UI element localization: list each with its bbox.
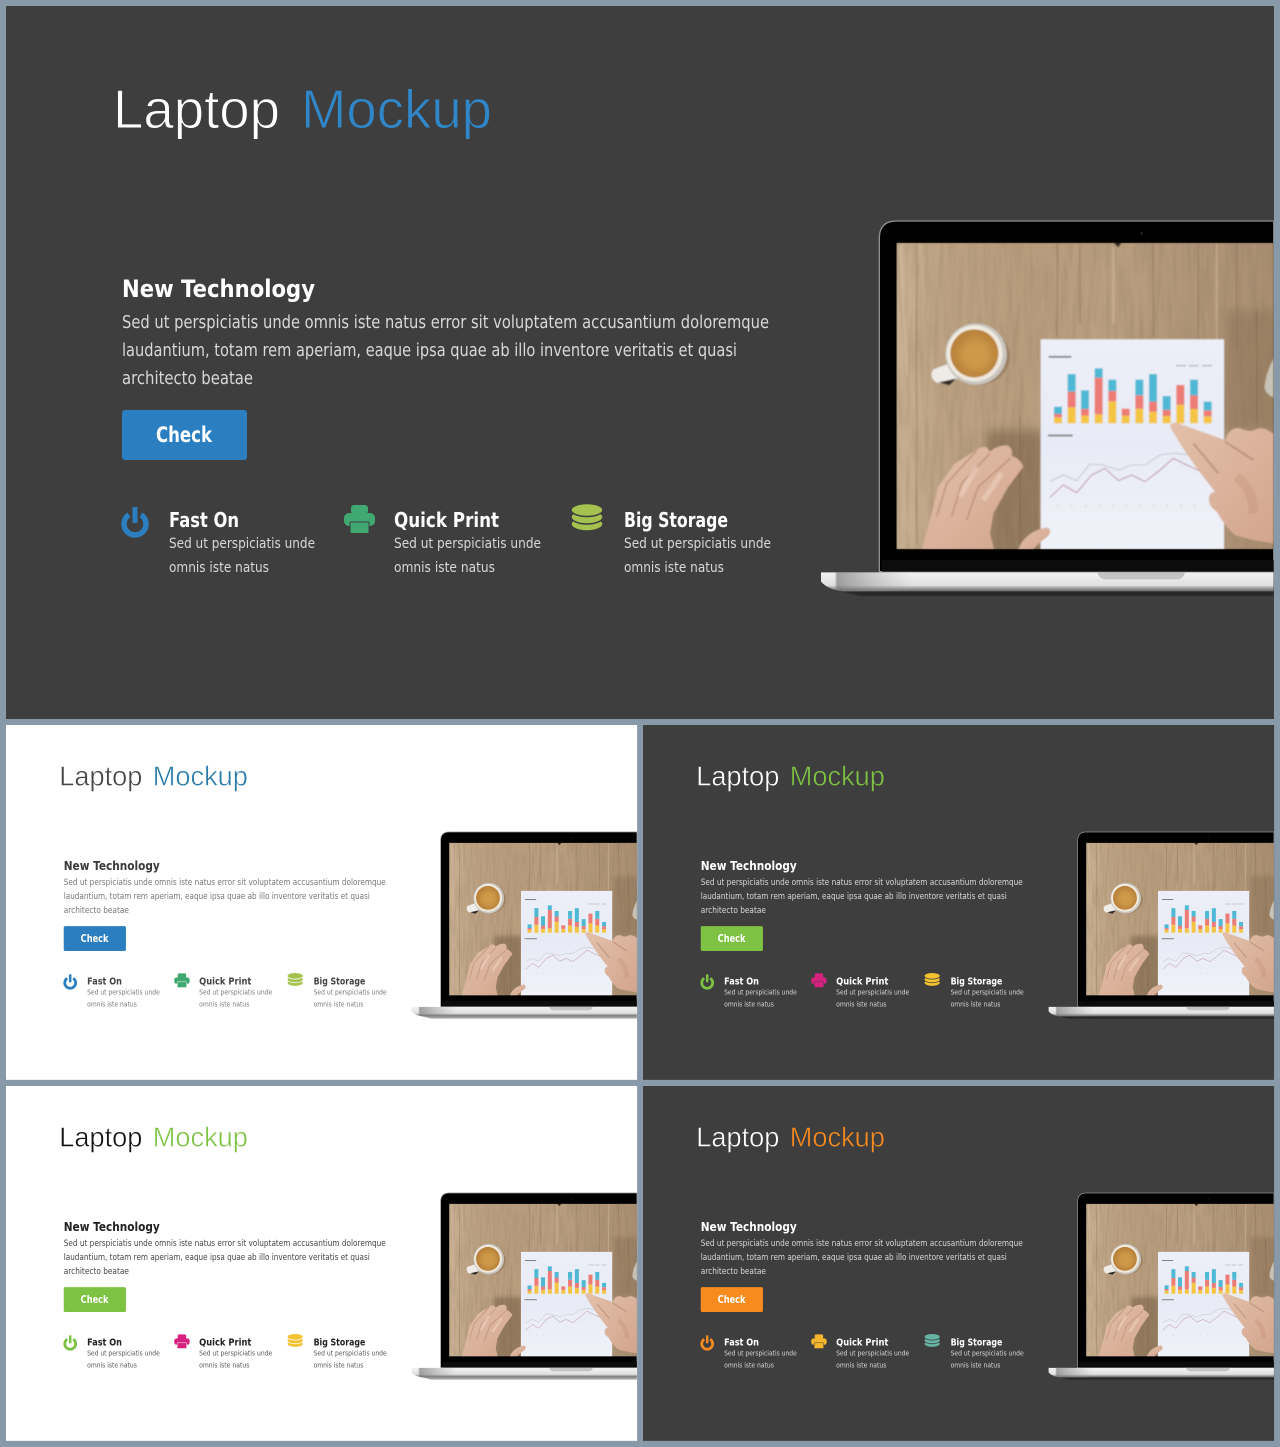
button: Check: Check — [718, 933, 746, 945]
feature: Big Storage: omnis iste natus — [951, 1362, 1001, 1370]
feature: Fast On: Sed ut perspiciatis unde — [87, 1350, 160, 1358]
feature: Big Storage — [924, 1334, 1024, 1370]
heading: New Technology — [122, 275, 315, 303]
feature: Fast On: Fast On — [169, 508, 239, 532]
laptop mockup with photo — [412, 832, 639, 1019]
feature: Fast On — [702, 1335, 797, 1370]
body text: Sed ut perspiciatis unde omnis iste natus error sit voluptatem accusantium doloremque — [64, 1239, 386, 1249]
button: Check: Check — [718, 1294, 746, 1306]
button: Check: Check — [156, 423, 213, 447]
body text: Sed ut perspiciatis unde omnis iste natus error sit voluptatem accusantium doloremque — [701, 1239, 1023, 1249]
body text: laudantium, totam rem aperiam, eaque ipsa quae ab illo inventore veritatis et quasi — [64, 892, 370, 902]
feature: Quick Print — [344, 505, 541, 576]
feature: Quick Print: Sed ut perspiciatis unde — [836, 1350, 909, 1358]
body text — [701, 878, 1023, 916]
title: Mockup — [153, 1122, 248, 1153]
title: Mockup — [153, 761, 248, 792]
feature: Fast On: Sed ut perspiciatis unde — [87, 989, 160, 997]
title: Laptop — [696, 761, 779, 792]
title: Mockup — [790, 1122, 885, 1153]
feature: Quick Print: Quick Print — [199, 1337, 252, 1348]
icon: power — [702, 1335, 713, 1349]
body text: Sed ut perspiciatis unde omnis iste natus error sit voluptatem accusantium doloremque — [122, 312, 769, 333]
feature: Fast On: Sed ut perspiciatis unde — [724, 1350, 797, 1358]
body text: architecto beatae — [701, 906, 766, 916]
panel: small white slide with green accent — [6, 1086, 639, 1441]
feature: Big Storage: Big Storage — [314, 1337, 366, 1348]
feature: Fast On — [702, 974, 797, 1009]
feature: Fast On: omnis iste natus — [169, 560, 269, 576]
feature: Quick Print: Sed ut perspiciatis unde — [836, 989, 909, 997]
icon: power — [124, 507, 146, 535]
heading: New Technology — [64, 1220, 160, 1234]
body text — [122, 312, 769, 389]
feature: Quick Print: Sed ut perspiciatis unde — [199, 989, 272, 997]
laptop mockup with photo — [1049, 832, 1276, 1019]
button: Check: Check — [81, 933, 109, 945]
icon: power — [65, 1335, 76, 1349]
body text — [64, 878, 386, 916]
feature: Quick Print: Quick Print — [199, 976, 252, 987]
body text: laudantium, totam rem aperiam, eaque ipsa quae ab illo inventore veritatis et quasi — [122, 340, 737, 361]
icon: storage stack — [287, 1334, 303, 1347]
feature: Big Storage: Big Storage — [624, 508, 728, 532]
feature: Quick Print — [811, 1334, 909, 1370]
feature: Fast On — [65, 1335, 160, 1370]
body text: laudantium, totam rem aperiam, eaque ipsa quae ab illo inventore veritatis et quasi — [701, 892, 1007, 902]
feature: Fast On: Sed ut perspiciatis unde — [724, 989, 797, 997]
feature: Quick Print: omnis iste natus — [836, 1362, 887, 1370]
body text: architecto beatae — [64, 906, 129, 916]
icon: printer — [811, 1334, 827, 1349]
feature: Fast On: omnis iste natus — [87, 1001, 137, 1009]
feature: Fast On: omnis iste natus — [724, 1001, 774, 1009]
feature: Quick Print — [174, 1334, 272, 1370]
feature: Quick Print: omnis iste natus — [836, 1001, 887, 1009]
feature: Big Storage: Big Storage — [314, 976, 366, 987]
feature: Quick Print: omnis iste natus — [394, 560, 495, 576]
feature: Fast On: omnis iste natus — [724, 1362, 774, 1370]
feature: Big Storage — [287, 1334, 387, 1370]
icon: storage stack — [924, 973, 940, 986]
feature: Fast On: Fast On — [87, 976, 122, 987]
laptop mockup with photo — [412, 1193, 639, 1380]
feature: Quick Print: Sed ut perspiciatis unde — [394, 536, 541, 552]
feature: Big Storage: Sed ut perspiciatis unde — [314, 1350, 387, 1358]
body text — [701, 1239, 1023, 1277]
body text: Sed ut perspiciatis unde omnis iste natus error sit voluptatem accusantium doloremque — [64, 878, 386, 888]
icon: printer — [811, 973, 827, 988]
button: Check — [701, 1287, 763, 1312]
feature: Quick Print: Sed ut perspiciatis unde — [199, 1350, 272, 1358]
feature: Big Storage: Sed ut perspiciatis unde — [951, 989, 1024, 997]
icon: storage stack — [571, 504, 603, 531]
feature: Big Storage — [924, 973, 1024, 1009]
feature: Big Storage — [571, 504, 771, 576]
panel: large dark slide with blue accent — [6, 6, 1278, 719]
button: Check — [64, 926, 126, 951]
title: Laptop — [59, 761, 142, 792]
icon: storage stack — [924, 1334, 940, 1347]
heading: New Technology — [701, 859, 797, 873]
icon: printer — [174, 1334, 190, 1349]
feature: Quick Print: Quick Print — [394, 508, 499, 532]
feature: Quick Print: Quick Print — [836, 976, 889, 987]
icon: printer — [344, 505, 375, 534]
feature: Big Storage: omnis iste natus — [624, 560, 724, 576]
icon: power — [65, 974, 76, 988]
body text: laudantium, totam rem aperiam, eaque ipsa quae ab illo inventore veritatis et quasi — [701, 1253, 1007, 1263]
title: Laptop — [113, 78, 280, 140]
laptop mockup with photo — [821, 221, 1278, 596]
icon: power — [702, 974, 713, 988]
button: Check: Check — [81, 1294, 109, 1306]
feature: Quick Print — [811, 973, 909, 1009]
title: Mockup — [790, 761, 885, 792]
feature: Fast On: Sed ut perspiciatis unde — [169, 536, 315, 552]
button: Check — [701, 926, 763, 951]
feature: Quick Print: omnis iste natus — [199, 1362, 250, 1370]
title: Laptop — [696, 1122, 779, 1153]
feature: Quick Print: Quick Print — [836, 1337, 889, 1348]
feature: Fast On — [65, 974, 160, 1009]
body text: architecto beatae — [64, 1267, 129, 1277]
feature: Big Storage: Sed ut perspiciatis unde — [951, 1350, 1024, 1358]
feature: Big Storage: omnis iste natus — [314, 1001, 364, 1009]
feature: Fast On: Fast On — [87, 1337, 122, 1348]
title: Laptop — [59, 1122, 142, 1153]
body text: architecto beatae — [122, 368, 253, 389]
feature: Quick Print: omnis iste natus — [199, 1001, 250, 1009]
feature: Big Storage: Big Storage — [951, 1337, 1003, 1348]
body text: laudantium, totam rem aperiam, eaque ipsa quae ab illo inventore veritatis et quasi — [64, 1253, 370, 1263]
feature: Fast On: Fast On — [724, 1337, 759, 1348]
feature: Big Storage — [287, 973, 387, 1009]
feature: Big Storage: Sed ut perspiciatis unde — [314, 989, 387, 997]
feature: Big Storage: omnis iste natus — [314, 1362, 364, 1370]
icon: printer — [174, 973, 190, 988]
feature: Big Storage: Sed ut perspiciatis unde — [624, 536, 771, 552]
laptop mockup with photo — [1049, 1193, 1276, 1380]
feature: Quick Print — [174, 973, 272, 1009]
panel: small dark slide with green accent — [643, 725, 1276, 1080]
body text — [64, 1239, 386, 1277]
heading: New Technology — [64, 859, 160, 873]
body text: architecto beatae — [701, 1267, 766, 1277]
body text: Sed ut perspiciatis unde omnis iste natus error sit voluptatem accusantium doloremque — [701, 878, 1023, 888]
feature: Big Storage: Big Storage — [951, 976, 1003, 987]
feature: Big Storage: omnis iste natus — [951, 1001, 1001, 1009]
icon: storage stack — [287, 973, 303, 986]
feature: Fast On: Fast On — [724, 976, 759, 987]
panel: small white slide with blue accent — [6, 725, 639, 1080]
panel: small dark slide with orange accent — [643, 1086, 1276, 1441]
feature: Fast On: omnis iste natus — [87, 1362, 137, 1370]
heading: New Technology — [701, 1220, 797, 1234]
title: Mockup — [301, 78, 492, 140]
button: Check — [64, 1287, 126, 1312]
button: Check — [122, 410, 247, 460]
feature: Fast On — [124, 507, 315, 576]
